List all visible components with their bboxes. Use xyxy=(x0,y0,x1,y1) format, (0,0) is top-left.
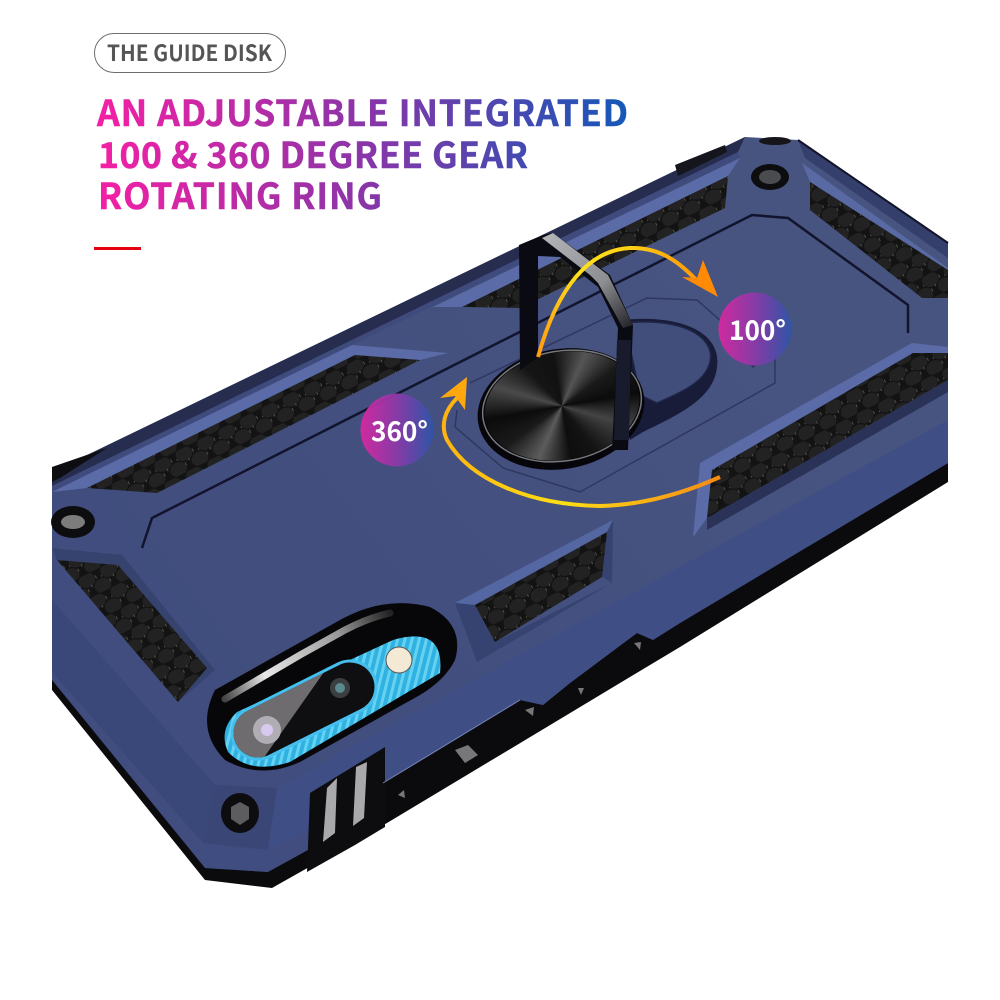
rubber grip: upper right xyxy=(810,182,948,298)
title: AN ADJUSTABLE INTEGRATED xyxy=(96,86,628,137)
title: ROTATING RING xyxy=(98,169,382,220)
tag: the guide disk: THE GUIDE DISK xyxy=(107,36,273,68)
arrow: 100 degrees xyxy=(538,248,718,357)
light strip top right xyxy=(802,163,948,272)
dark strip under mid right rubber xyxy=(707,380,948,530)
top right edge line xyxy=(798,140,948,243)
rotating disc xyxy=(476,339,648,473)
top nub xyxy=(759,137,791,145)
top right edge band xyxy=(798,140,948,258)
badge: 100 degrees xyxy=(718,292,792,366)
corner facet xyxy=(203,785,277,850)
case black underside xyxy=(52,440,948,888)
side button highlights xyxy=(398,642,641,798)
title: 100 & 360 DEGREE GEAR xyxy=(98,128,528,179)
top side buttons xyxy=(675,145,727,176)
arrow: 360 degrees xyxy=(440,377,720,506)
screw: left xyxy=(51,506,95,538)
light strip upper left xyxy=(52,345,448,492)
rubber grip: upper mid xyxy=(462,176,728,308)
corner face xyxy=(203,845,268,872)
rubber grip: upper left xyxy=(87,355,420,493)
side grip with silver stripes xyxy=(307,747,385,872)
top dark edge band xyxy=(52,137,745,486)
bevel along upper edge xyxy=(52,152,740,492)
rubber grip: lower left xyxy=(57,560,207,702)
left side nub xyxy=(52,448,107,482)
inner panel line xyxy=(142,215,908,548)
lower bevel side xyxy=(203,420,948,850)
disc metal rim xyxy=(474,338,650,474)
accent line xyxy=(94,247,141,250)
side edge highlight xyxy=(383,700,520,783)
phone case xyxy=(51,137,948,888)
D ring xyxy=(519,233,633,450)
screw: top right xyxy=(751,164,789,190)
badge: 360 degrees: 360° xyxy=(371,410,428,449)
case main body xyxy=(52,137,948,872)
light strip upper mid xyxy=(433,158,740,307)
rubber grip: lower mid xyxy=(475,532,607,642)
left bevel side xyxy=(52,600,215,843)
light strip lower mid xyxy=(455,520,613,605)
title xyxy=(96,86,628,220)
light strip mid right xyxy=(693,343,948,537)
screw: bottom left xyxy=(221,793,259,833)
badge: 100 degrees: 100° xyxy=(729,309,786,348)
rubber grip: mid right xyxy=(707,353,948,518)
disc shadow rim xyxy=(468,335,654,483)
light strip lower left xyxy=(52,548,215,702)
badge: 360 degrees xyxy=(360,394,434,466)
bevels of lower mid rubber xyxy=(455,520,613,662)
ring base plate xyxy=(455,298,775,492)
camera module xyxy=(207,603,457,771)
